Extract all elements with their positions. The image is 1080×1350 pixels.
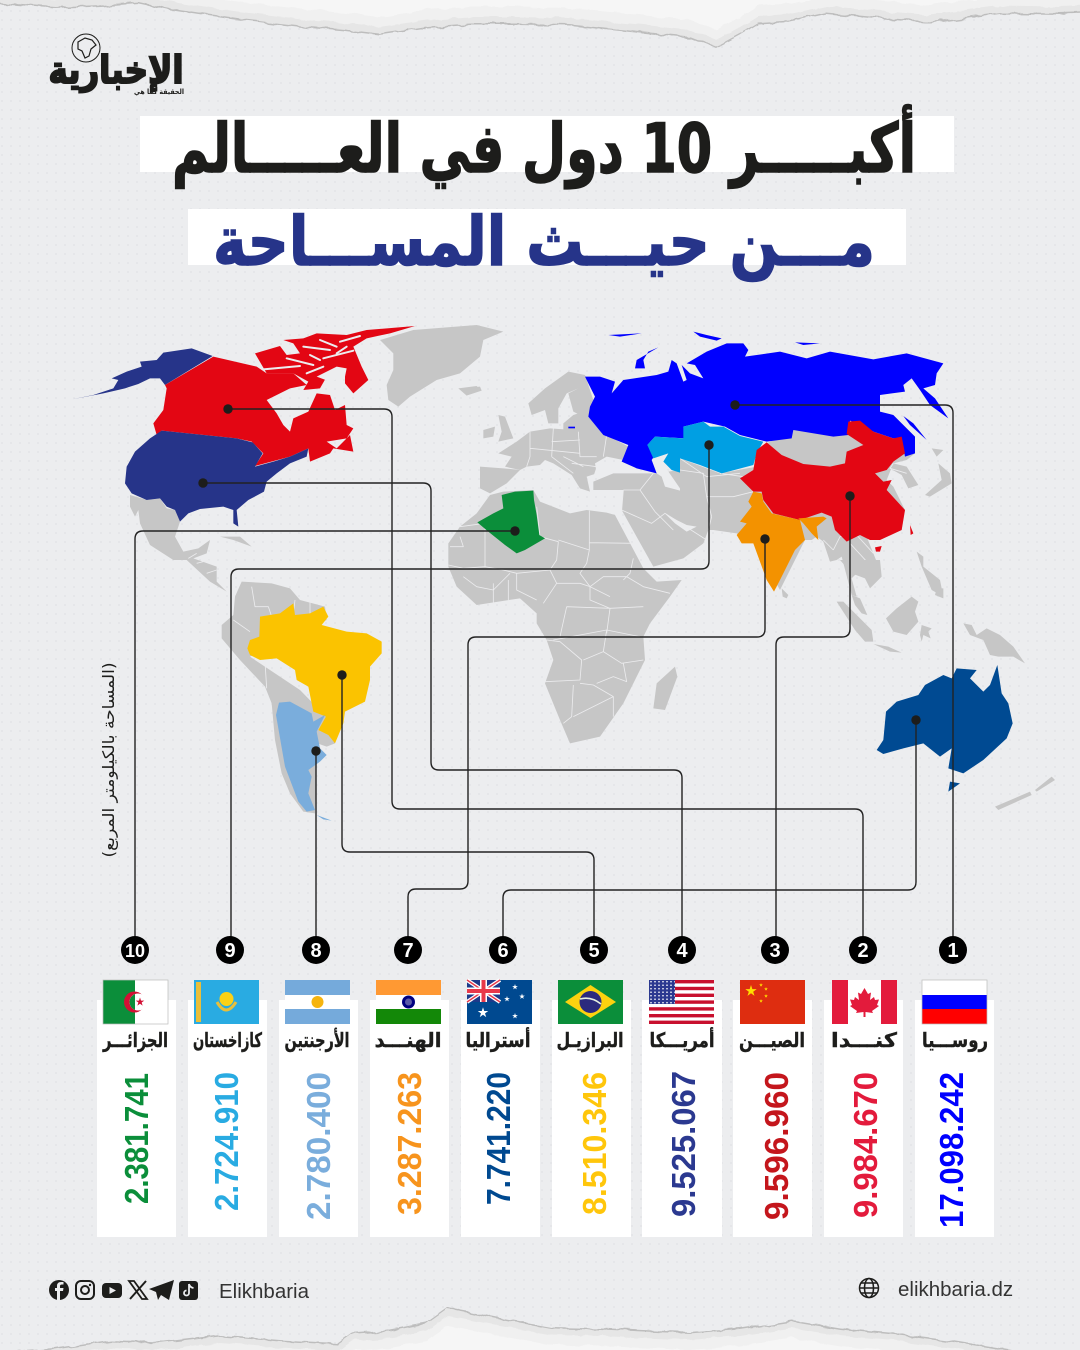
- card: Brazil: 8.510.346: [576, 1072, 613, 1215]
- card: India: الهنـــد: [374, 1028, 442, 1052]
- flag: Algeria: [103, 980, 168, 1024]
- flag: Argentina: [285, 980, 350, 1024]
- axis note: area unit: (المساحة بالكيلومتر المربع): [99, 663, 119, 857]
- rank badges: 8: [310, 940, 322, 962]
- footer handle: Elikhbaria: [219, 1280, 310, 1303]
- rank badges: 7: [402, 940, 414, 962]
- card: Algeria: [97, 980, 176, 1237]
- logo: Elikhbaria: الحقيقة كما هي: [134, 88, 184, 96]
- rank badges: 10: [125, 941, 145, 961]
- icon: globe: [860, 1278, 878, 1298]
- rank badges: 9: [224, 940, 236, 962]
- flag: Russia: [922, 980, 987, 1024]
- icon: facebook: [49, 1280, 69, 1300]
- card: Algeria: الجزائـــر: [102, 1028, 168, 1052]
- map: South America: [222, 582, 382, 821]
- card: Canada: كنـــدا: [831, 1028, 897, 1052]
- logo: Elikhbaria: الإخبارية: [48, 48, 184, 92]
- map: Africa, Europe, Middle East: [448, 372, 682, 743]
- social media icons: [49, 1280, 198, 1300]
- flag: India: [376, 980, 441, 1024]
- card: Argentina: الأرجنتين: [284, 1027, 350, 1052]
- card: Kazakhstan: [188, 980, 267, 1237]
- rank badges: 4: [676, 940, 688, 962]
- card: Australia: أستراليا: [466, 1026, 530, 1052]
- icon: tiktok: [179, 1281, 198, 1300]
- card: Algeria: 2.381.741: [118, 1073, 155, 1204]
- rank badges: 3: [769, 940, 781, 962]
- card: Russia: [915, 980, 994, 1237]
- rank badges: [121, 936, 967, 964]
- icon: instagram: [76, 1281, 94, 1299]
- title: top 10 largest countries: أكبـــــر 10 دول في العـــــالم: [172, 104, 916, 189]
- card: USA: 9.525.067: [665, 1071, 702, 1217]
- flag: Canada: [832, 980, 897, 1024]
- card: China: 9.596.960: [758, 1072, 795, 1220]
- card: Argentina: 2.780.400: [300, 1072, 337, 1220]
- rank badges: 2: [857, 940, 869, 962]
- flag: Brazil: [558, 980, 623, 1024]
- card: Canada: [824, 980, 903, 1237]
- card: Australia: 7.741.220: [480, 1072, 517, 1205]
- icon: youtube: [102, 1283, 122, 1298]
- card: Russia: روســـيا: [922, 1028, 988, 1052]
- connector lines: [135, 400, 953, 950]
- logo: Elikhbaria: [48, 34, 184, 96]
- card: Russia: 17.098.242: [933, 1072, 970, 1228]
- flag: USA: [649, 980, 714, 1024]
- card: Brazil: البرازيـل: [556, 1028, 624, 1052]
- rank badges: 1: [947, 940, 959, 962]
- subtitle: by area: مـــن حيـــث المســـاحة: [213, 203, 875, 282]
- card: China: الصيـــن: [739, 1028, 805, 1052]
- flag: Kazakhstan: [194, 980, 259, 1024]
- card: Kazakhstan: 2.724.910: [208, 1072, 245, 1211]
- card: USA: [642, 980, 722, 1237]
- footer website: elikhbaria.dz: [898, 1278, 1013, 1301]
- world map: [72, 325, 1055, 821]
- icon: telegram: [149, 1280, 174, 1300]
- card: Canada: 9.984.670: [847, 1072, 884, 1218]
- card: India: [370, 980, 449, 1237]
- flag: Australia: [467, 980, 532, 1024]
- card: USA: أمريـــكا: [650, 1026, 714, 1052]
- map: Asia: [568, 332, 952, 598]
- icon: X: [129, 1281, 147, 1299]
- rank badges: 5: [588, 940, 600, 962]
- card: India: 3.287.263: [391, 1072, 428, 1215]
- card: Kazakhstan: كازاخستان: [193, 1028, 262, 1052]
- rank badges: 6: [497, 940, 509, 962]
- card: Brazil: [552, 980, 631, 1237]
- flag: China: [740, 980, 805, 1024]
- map: North America: [72, 325, 503, 592]
- torn paper edge: bottom: [0, 1308, 1080, 1350]
- torn paper edge: top: [0, 0, 1080, 48]
- card: Argentina: [279, 980, 358, 1237]
- map: South-East Asia and Oceania: [837, 560, 1055, 810]
- card: Australia: [461, 980, 540, 1237]
- card: China: [733, 980, 812, 1237]
